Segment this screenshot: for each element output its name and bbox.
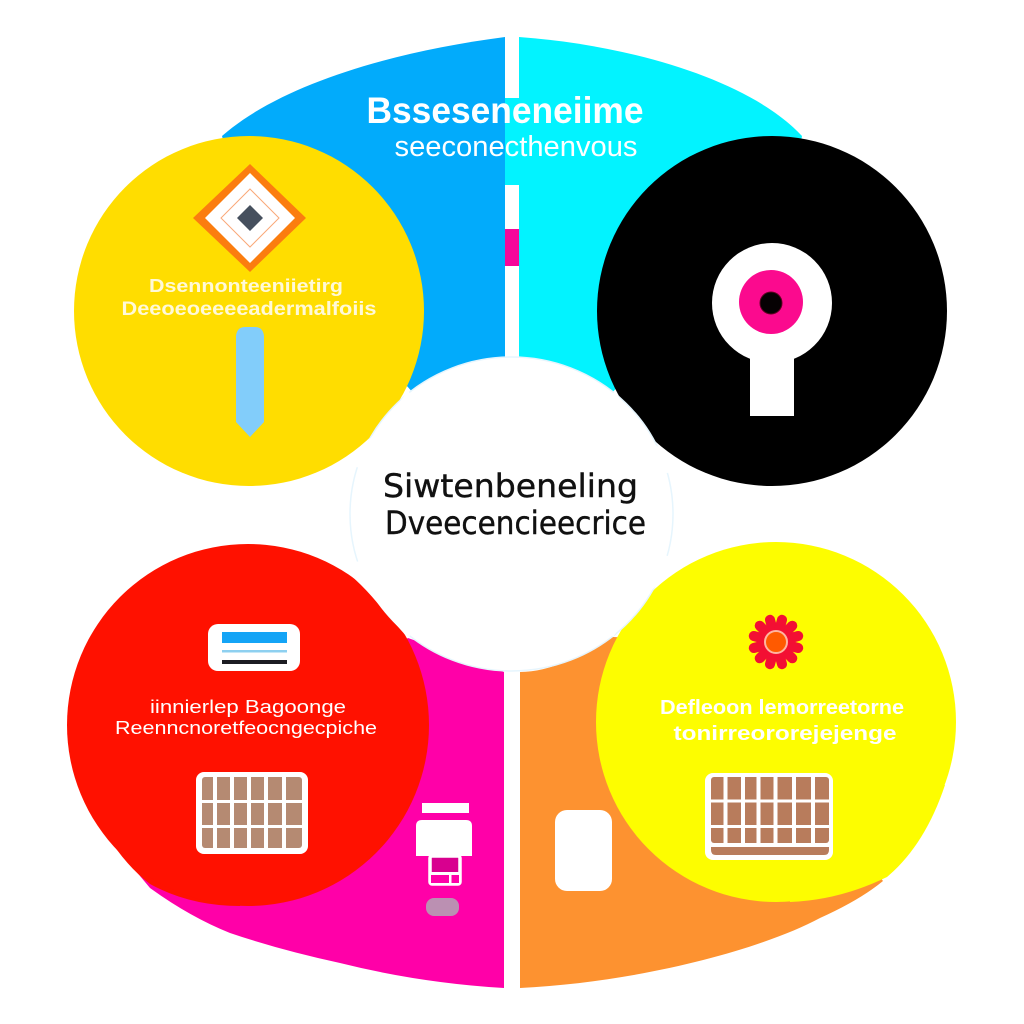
label: yellow circle text: tonirreororejejenge <box>674 723 896 745</box>
panel: yellow circle top-left <box>74 136 424 486</box>
heading: Bsseseneneiime <box>366 90 644 131</box>
label: red circle text: iinnierlep Bagoonge <box>150 697 346 717</box>
panel: top-right cyan segment <box>519 37 802 395</box>
label: red circle text <box>115 697 377 738</box>
icon: white rounded tile <box>555 810 612 891</box>
panel: central white circle <box>340 357 690 671</box>
panel: centre cyan bridge <box>505 98 519 185</box>
central divider blocks <box>505 185 519 358</box>
label: central text: Dveecencieecrice <box>385 504 646 542</box>
icon: gear <box>754 620 798 664</box>
subheading: seeconecthenvous <box>394 131 638 163</box>
label: yellow circle text <box>660 697 904 745</box>
icon: grid <box>196 772 308 854</box>
label: yellow circle text: Defleoon lemorreetorne <box>660 697 904 719</box>
label: yellow circle text: Dsennonteeniietirg <box>149 276 343 296</box>
icon: keyhole eye <box>712 243 832 416</box>
panel: yellow circle bottom-right <box>596 542 956 902</box>
panel: bottom-right orange segment <box>520 637 883 988</box>
panel: top-left blue segment <box>222 37 505 395</box>
label: central text <box>383 467 646 542</box>
icon: grid <box>705 773 833 860</box>
icon: diamond <box>193 164 306 272</box>
icon: plug device <box>416 803 472 916</box>
panel: black circle top-right <box>597 136 947 486</box>
icon: card <box>208 624 300 671</box>
label: yellow circle text: Deeoeoeeeeadermalfoiis <box>122 299 376 320</box>
icon: blue bar <box>236 327 264 437</box>
bottom divider <box>504 672 520 988</box>
label: yellow circle text <box>122 276 376 320</box>
panel: red circle bottom-left <box>67 544 429 906</box>
label: red circle text: Reenncnoretfeocngecpiche <box>115 718 377 738</box>
label: central text: Siwtenbeneling <box>383 467 638 505</box>
panel: bottom-left magenta segment <box>135 638 504 988</box>
